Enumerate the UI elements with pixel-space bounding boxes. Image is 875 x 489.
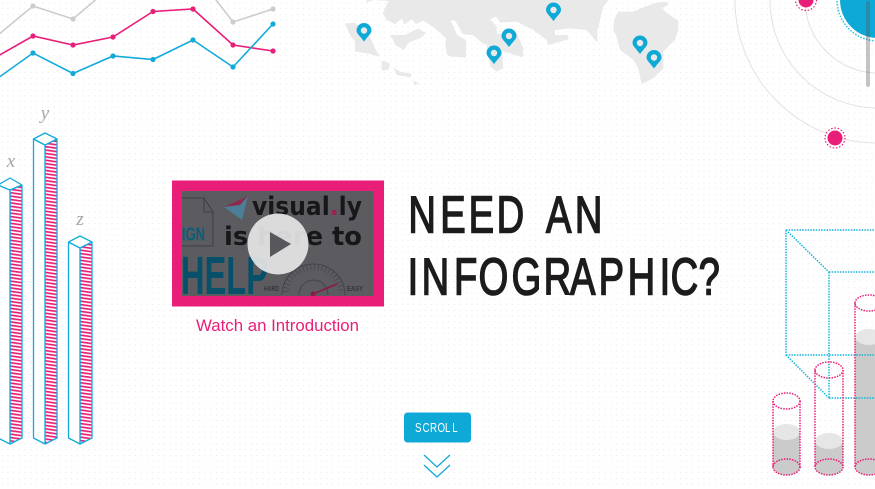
axis letters: x [6,151,16,172]
scroll button [404,412,471,442]
pin 3 [486,46,502,64]
pink frame [172,180,384,306]
bar y [34,133,57,444]
pin 5 [632,36,648,54]
bar x [0,178,22,444]
line chart [0,0,276,78]
orbit diagram [735,0,875,148]
scroll chevrons [424,455,450,477]
headline: INFOGRAPHIC? [408,248,720,306]
headline [408,186,720,306]
document icon [182,198,214,246]
map pins [356,3,662,69]
gauge [282,264,345,295]
pin 6 [646,50,662,68]
cylinder chart with dotted cube [773,230,875,475]
video thumbnail [172,180,384,335]
blue circle [837,0,875,41]
video still: HELP [181,246,268,306]
pink dot [825,128,845,148]
axis letters: y [39,103,50,124]
scroll bar [866,1,870,87]
play button [248,214,308,274]
pin 2 [502,29,516,47]
axis letters [6,103,84,230]
pin 4 [546,3,561,21]
map land [345,0,678,85]
headline: NEED AN [408,186,602,244]
world map with pins [345,0,678,85]
scroll button: SCROLL [415,422,458,435]
pin 1 [356,23,372,42]
dotted cylinders [773,295,875,475]
logo mark [224,196,248,220]
video still: IGN [182,224,205,244]
orbit arcs [735,0,875,143]
video caption: Watch an Introduction [196,316,359,335]
bar z [68,236,92,444]
pink dot top [796,0,816,10]
series: pink line [0,6,276,56]
dotted cube [786,230,875,398]
video still: HARD [264,286,279,293]
video still: visual.ly [252,192,362,222]
cylinder fills [773,329,875,475]
series: blue line [0,21,276,78]
series: gray line [0,0,276,35]
3D bar chart [0,103,92,444]
video still: is here to [224,222,362,252]
axis letters: z [75,209,84,230]
video still: EASY [347,286,363,293]
video still [182,191,374,296]
